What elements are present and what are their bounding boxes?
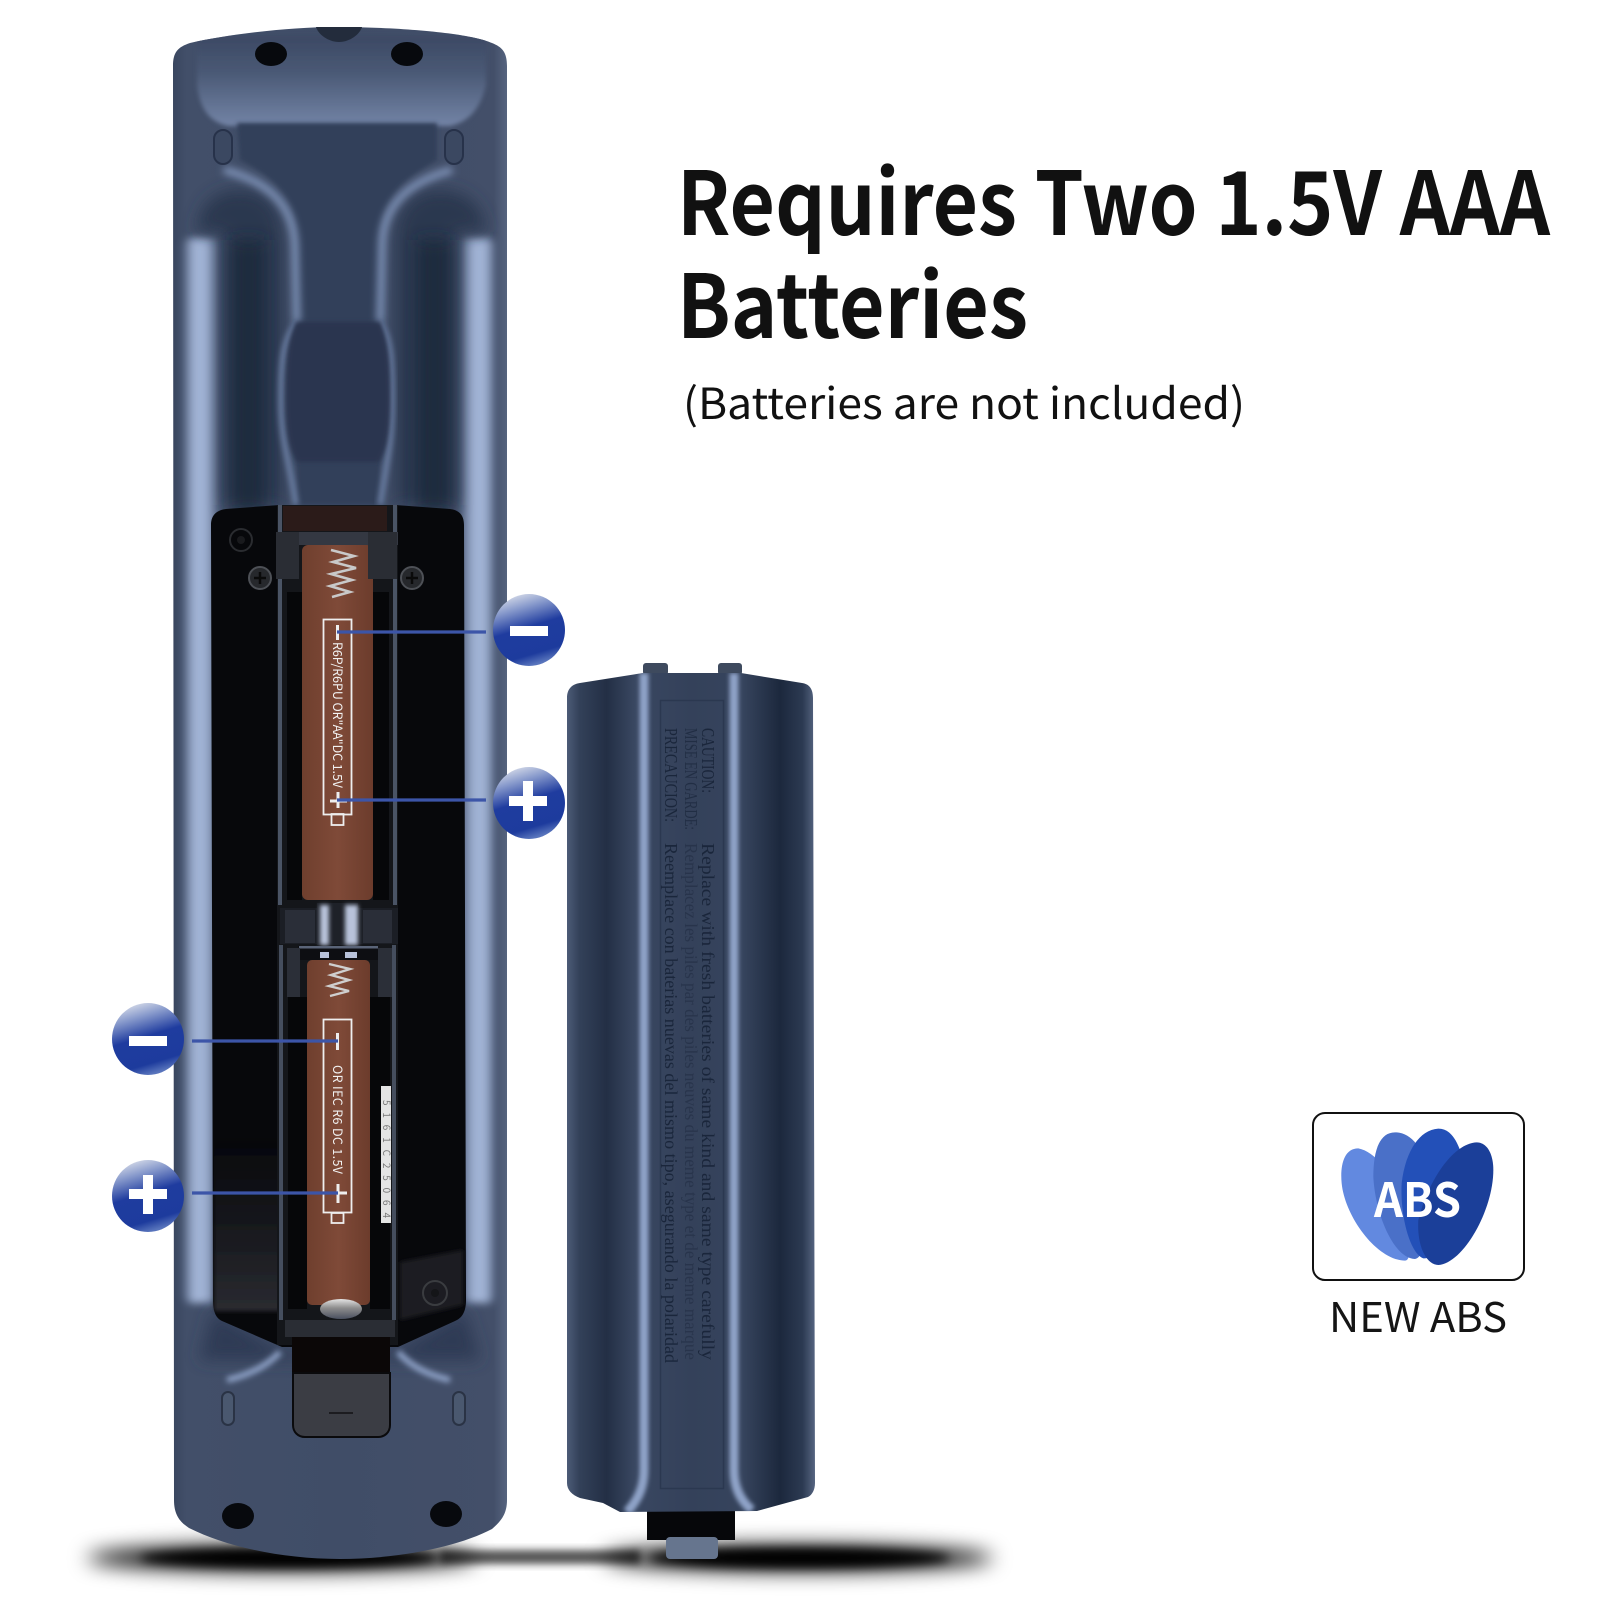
top side slots	[214, 130, 463, 164]
icon: ABS petals	[1341, 1129, 1493, 1265]
cover latch	[647, 1510, 735, 1540]
battery bay frame	[277, 505, 398, 1345]
badge frame	[1313, 1113, 1524, 1280]
cover shell	[567, 673, 815, 1512]
title	[677, 134, 1551, 364]
callout: lower minus	[112, 1003, 338, 1075]
badge caption: NEW ABS	[1329, 1284, 1507, 1344]
lower spring	[329, 964, 350, 996]
upper polarity label	[324, 620, 352, 825]
latch recess	[292, 1337, 390, 1375]
latch tab	[293, 1373, 390, 1437]
cover engraved caution text: CAUTION:	[698, 728, 718, 793]
cover engraved caution text: Reemplace con baterias nuevas del mismo tipo, asegurando la polaridad	[661, 843, 681, 1363]
cover engraved caution text: PRECAUCION:	[661, 728, 681, 822]
remote body shell	[173, 27, 507, 1559]
callout: upper minus	[337, 594, 565, 666]
upper spring	[330, 550, 356, 597]
cover top tabs	[643, 663, 742, 675]
cover engraved caution text: MISE EN GARDE:	[681, 728, 701, 830]
lower polarity label: OR IEC R6 DC 1.5V	[329, 1065, 348, 1175]
moulded surface relief	[183, 36, 496, 1380]
battery compartment panel	[211, 505, 466, 1347]
upper polarity label: R6P/R6PU OR"AA"DC 1.5V	[329, 642, 348, 789]
badge ABS text: ABS	[1373, 1162, 1461, 1231]
lower AAA bay brown strip	[307, 960, 370, 1305]
upper AAA bay brown strip	[302, 545, 373, 900]
subtitle: (Batteries are not included)	[683, 370, 1245, 432]
cover engraved caution text	[661, 728, 718, 1363]
cover foot	[666, 1537, 718, 1559]
battery cover	[567, 663, 815, 1559]
lower frame bar	[285, 1320, 395, 1347]
upper bay clip	[276, 532, 398, 579]
bottom side slots	[222, 1392, 465, 1425]
serial sticker: 5161C25064	[380, 1100, 395, 1218]
bottom contact screw	[320, 1299, 362, 1319]
callout: upper plus	[337, 767, 565, 839]
cover engraved caution text: Replace with fresh batteries of same kind and same type carefully	[698, 843, 718, 1360]
title: Batteries	[677, 237, 1028, 364]
polarity callouts	[112, 594, 565, 1232]
top screw holes	[255, 42, 423, 66]
ABS material badge	[1313, 1113, 1524, 1344]
bottom screw holes	[222, 1501, 462, 1529]
remote control back	[173, 27, 507, 1559]
top notch	[316, 27, 362, 42]
cover engraved caution text: Remplacez les piles par des piles neuves du meme type et de meme marque	[681, 843, 701, 1360]
middle clip and contact	[280, 903, 398, 997]
ground shadow	[87, 1545, 993, 1571]
panel screw and marks	[230, 529, 447, 1305]
lower polarity label	[324, 1020, 352, 1223]
panel reflections	[214, 1130, 280, 1311]
cover highlights and inset	[627, 673, 752, 1512]
callout: lower plus	[112, 1160, 338, 1232]
